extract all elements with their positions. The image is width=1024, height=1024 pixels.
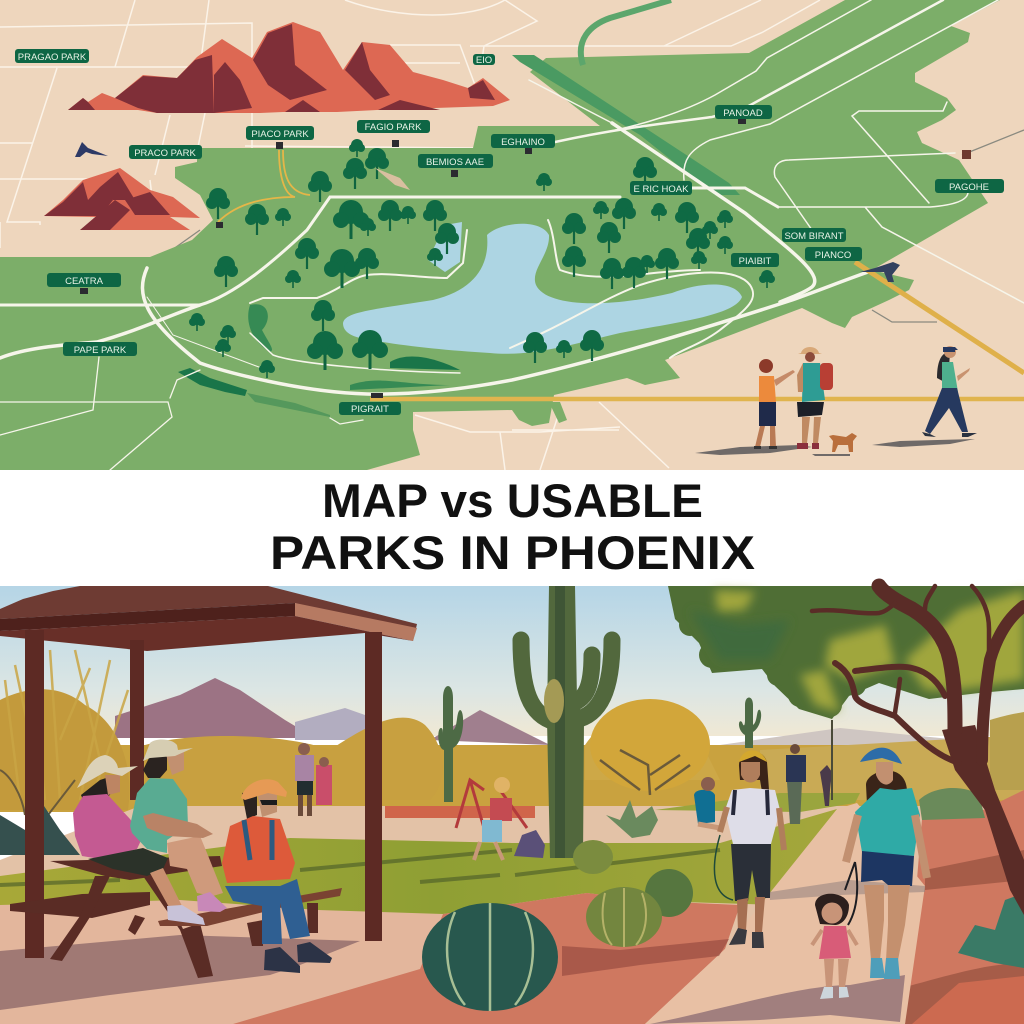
label [246,126,314,140]
blue shirt seated [694,777,720,828]
label: SOM BIRANT [784,231,844,242]
lawn [0,809,870,914]
park roads [0,0,1024,470]
sidewalk shadows [650,975,905,1024]
person: teal top [797,347,833,449]
small figure near trail end [860,262,900,282]
lower green strip [549,402,567,423]
label [473,54,495,66]
label: PIAIBIT [739,256,772,267]
posts [25,630,382,958]
label: FAGIO PARK [365,122,422,133]
map trees [189,139,775,378]
title: MAP vs USABLE [322,474,703,527]
person: green shirt and hat [130,739,227,912]
darker diagonal green band [512,55,740,195]
label [630,181,692,195]
people walking over the map [695,346,977,456]
people on picnic bench [73,739,332,973]
underside [0,616,413,651]
label: CEATRA [65,276,104,287]
rock [912,976,1024,1024]
label: PAPE PARK [74,345,127,356]
person: walker in blue [922,346,977,437]
child with harness [812,862,857,999]
playground frame [456,780,527,828]
label: PIACO PARK [251,129,309,140]
label: PRACO PARK [134,148,196,159]
woman with yellow hat [714,750,784,948]
tree trunk [812,586,1024,915]
label [47,273,121,287]
small lake lobe [428,222,462,272]
ground: upper path [0,806,1024,1024]
agave shrub [606,800,658,838]
dog [829,433,857,452]
tree canopy [668,586,1024,800]
parkland green area [0,0,1000,470]
label [935,179,1004,193]
label: EIO [476,55,492,66]
red desert soil [233,893,740,1024]
street grid [0,0,820,470]
label [805,247,862,261]
roof side fascia [295,603,417,641]
label [731,253,779,267]
label: PIANCO [815,250,851,261]
woman with blue hat [846,748,927,979]
mountains top [68,22,510,113]
label [63,342,137,356]
person: orange shirt [754,359,795,449]
far walker [786,744,806,824]
lake [343,224,742,354]
right shrub [919,788,985,820]
label: PANOAD [723,108,763,119]
distant mountains [115,678,960,770]
patio [0,900,443,1024]
small figure on map [75,142,108,157]
yellow trail [218,150,1024,399]
saguaro large [521,586,612,858]
soil shadow [562,939,729,976]
label: PAGOHE [949,182,989,193]
panel: park map [0,0,1024,470]
yellow desert shrubs [0,650,1024,815]
title line two: PARKS IN PHOENIX [270,526,755,579]
label: PIGRAIT [351,404,389,415]
roof front fascia [0,603,295,631]
label [357,120,430,133]
playing child [474,777,512,860]
map labels [15,49,1004,415]
label [418,154,493,168]
patio shadow [0,935,360,1010]
right red soil [905,790,1024,1024]
label: E RIC HOAK [634,184,689,195]
label [129,145,202,159]
map bushes near trail [375,168,410,190]
label: PRAGAO PARK [18,52,87,63]
barrel cactus large [422,903,558,1011]
distant saguaro [438,686,463,802]
family far left [295,743,332,816]
title band [0,470,1024,586]
sidewalk [645,803,925,1024]
barrel cactus small [573,840,613,874]
far walker two [820,765,832,806]
park dark green bushes [178,304,460,417]
label [715,105,772,119]
label [491,134,555,148]
person: red jacket and orange hat [222,779,332,973]
map signposts [80,119,971,398]
small saguaro right [739,698,761,748]
dark agave left [0,800,80,855]
picnic shelter [0,586,417,978]
palo verde tree [590,699,710,795]
label: EGHAINO [501,137,545,148]
far figures [295,743,832,860]
label: BEMIOS AAE [426,157,484,168]
panel: park scene [0,586,1024,1024]
barrel cactus medium right [645,869,693,917]
child sitting [514,830,545,858]
person: pink sweater and hat [73,755,205,925]
mountains lower left [44,168,200,230]
barrel cactus medium [586,887,662,947]
far grass strip [655,793,860,812]
green curved path [581,0,671,65]
label [339,402,401,415]
soil shadow right [905,850,1024,1024]
picnic table and benches [10,856,342,978]
roof top [0,586,417,641]
grey roads [148,130,1024,322]
agave right [958,893,1024,968]
